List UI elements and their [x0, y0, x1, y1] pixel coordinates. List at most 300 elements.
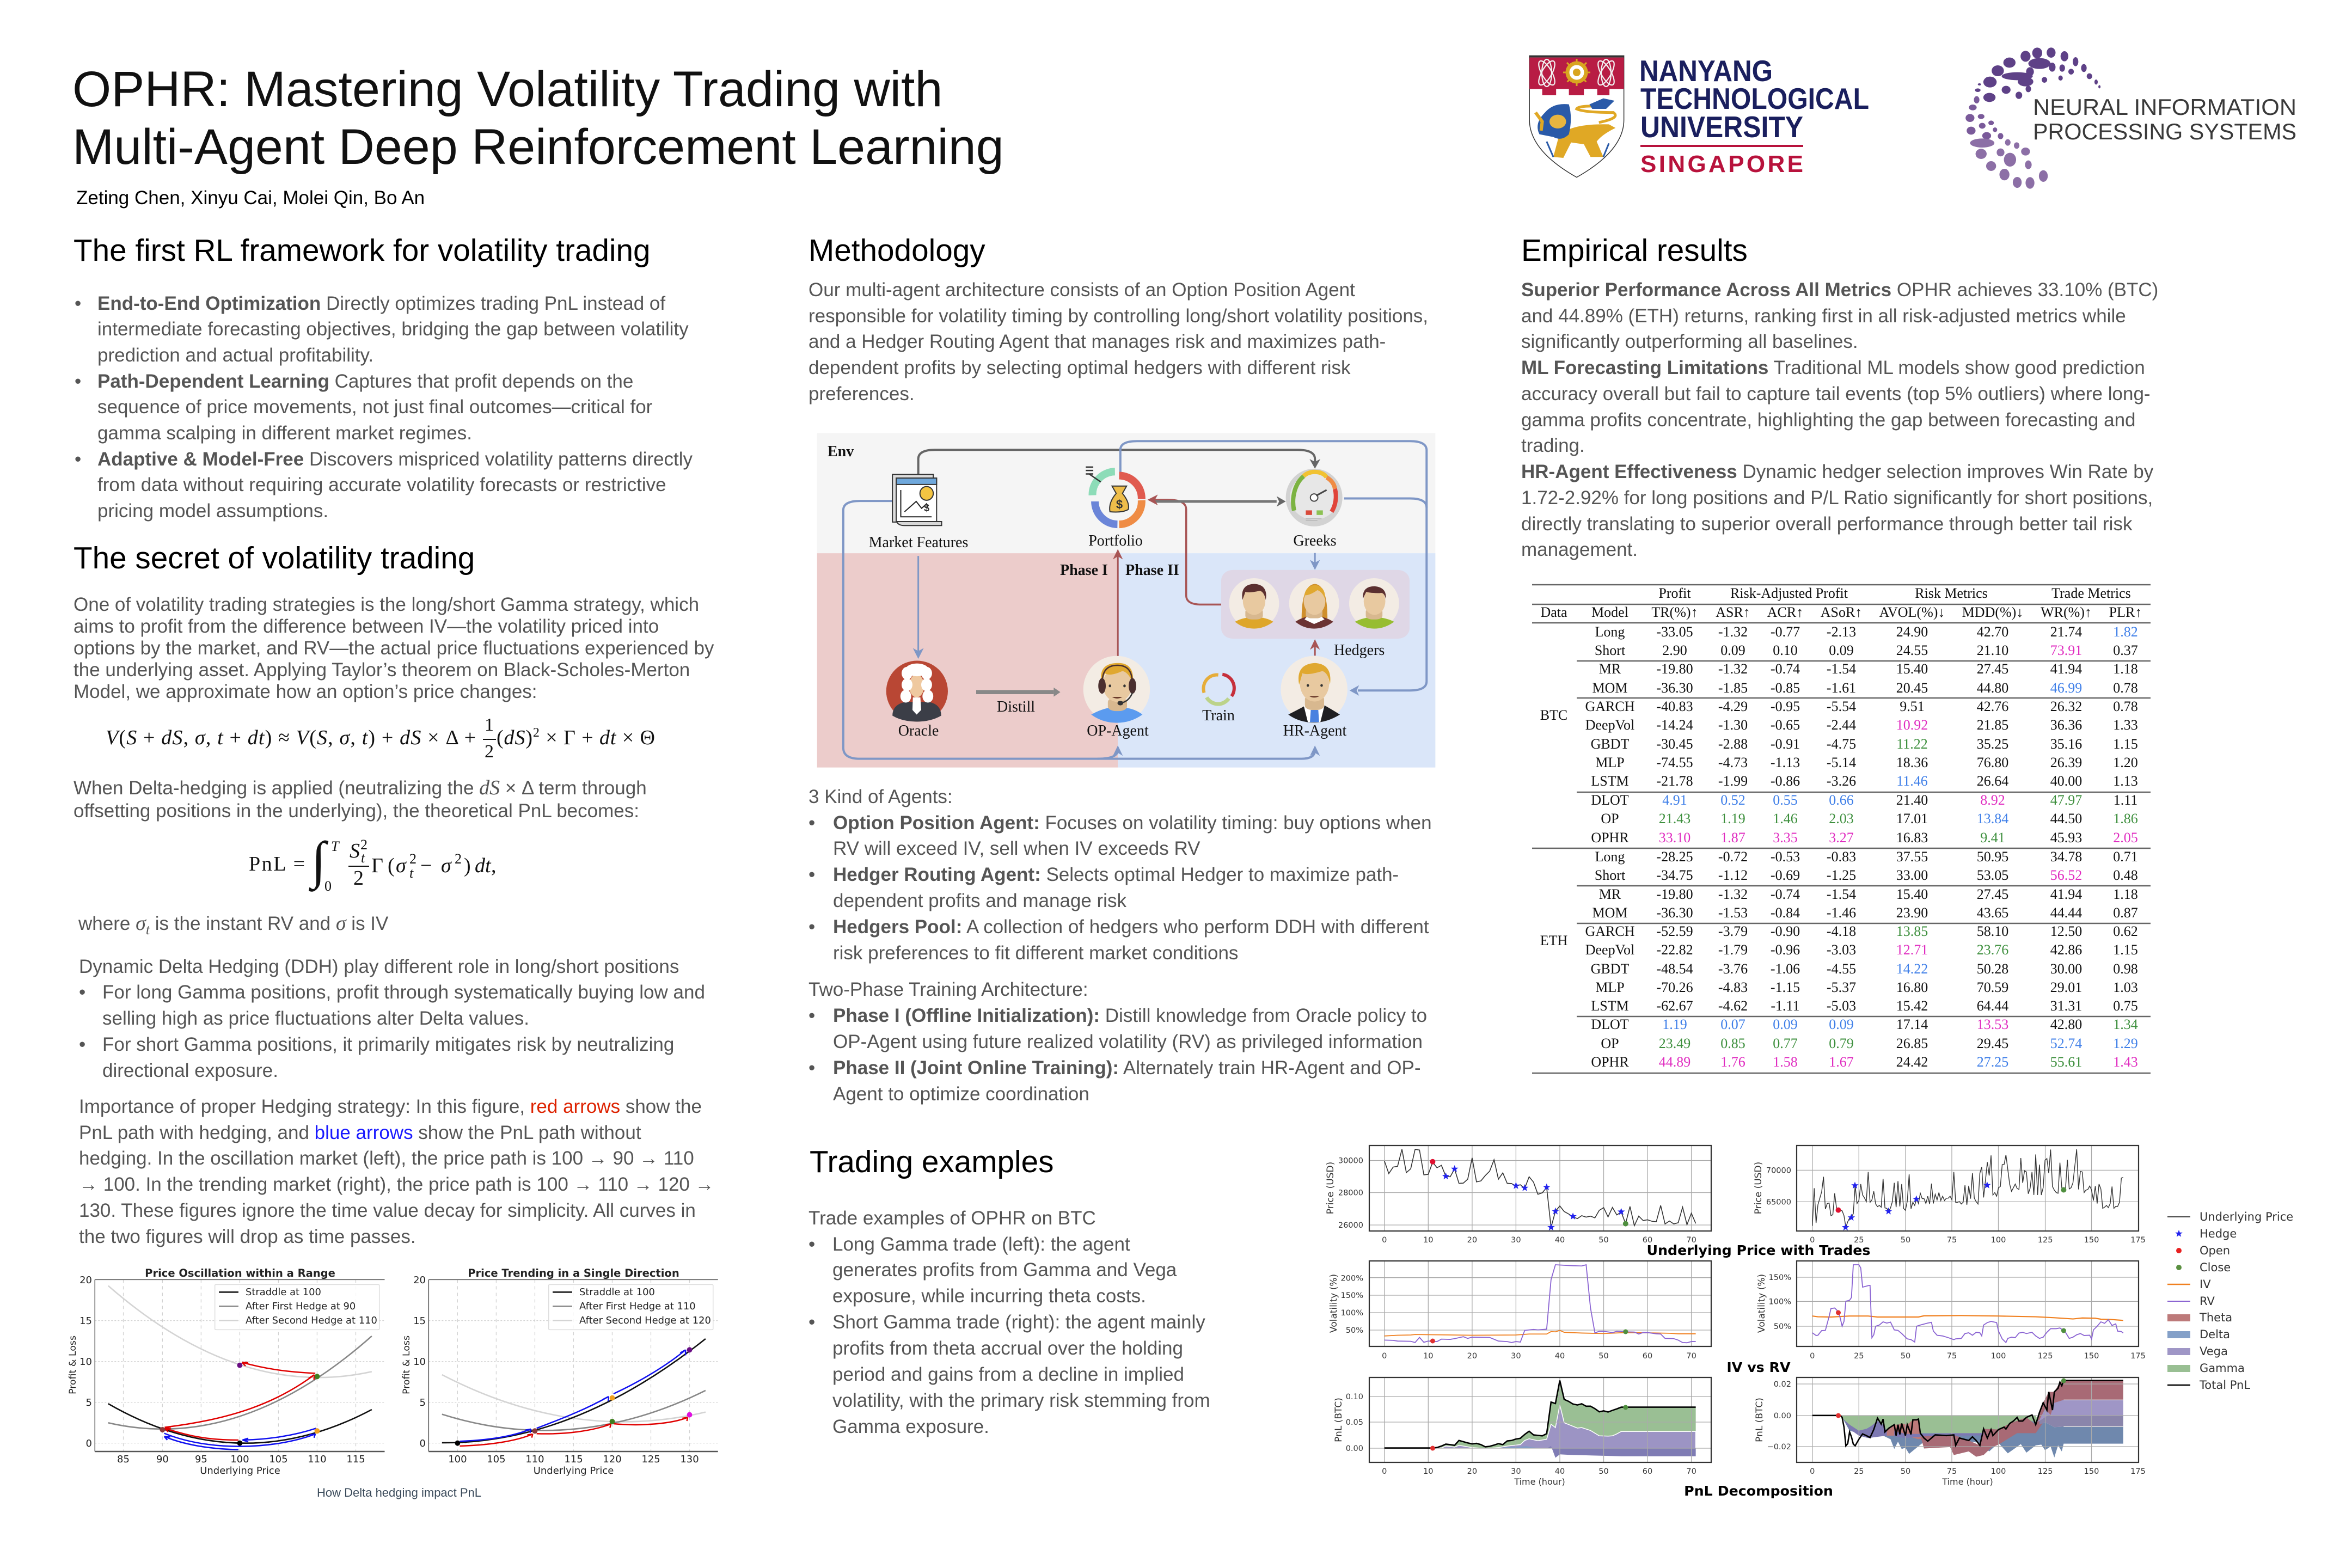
table: ETH rows: MOM [1592, 905, 1628, 921]
text block: importance of hedging: hedging. In the oscillation market (left), the price path is 100 → 90 → 110 [79, 1148, 694, 1169]
table: ETH rows: 0.48 [2113, 867, 2138, 883]
table: ETH rows: 58.10 [1977, 923, 2008, 939]
table: BTC rows: 26.64 [1977, 773, 2008, 789]
chart: short gamma IV vs RV: 100% [1769, 1297, 1791, 1306]
table header: Trade Metrics [2051, 585, 2131, 601]
chart: long gamma IV vs RV: 20 [1467, 1352, 1477, 1361]
text block: trade examples: generates profits from Gamma and Vega [832, 1259, 1177, 1281]
table: ETH rows [1540, 849, 2138, 1070]
table: BTC rows: 0.10 [1773, 642, 1798, 658]
table: BTC rows: -4.75 [1827, 736, 1856, 752]
table: ETH rows: -34.75 [1656, 867, 1693, 883]
table: ETH rows: 0.09 [1773, 1016, 1798, 1032]
table: BTC rows: 24.90 [1896, 624, 1928, 640]
chart: long gamma IV vs RV: 60 [1643, 1352, 1652, 1361]
table: BTC rows: -1.54 [1827, 661, 1856, 677]
equation: PnL integral: dt [475, 854, 492, 877]
table: BTC rows: -1.85 [1718, 680, 1748, 696]
text block: trade examples: • [808, 1312, 815, 1333]
chart: price trending in a single direction: After First Hedge at 110 [579, 1301, 696, 1312]
table: BTC rows: 0.55 [1773, 792, 1798, 808]
chart: price trending in a single direction: 100 [448, 1454, 467, 1465]
table: ETH rows: 27.45 [1977, 886, 2008, 902]
text block: trade examples: Short Gamma trade (right): the agent mainly [832, 1312, 1205, 1333]
table: ETH rows: -62.67 [1656, 998, 1693, 1014]
table: ETH rows: 24.42 [1896, 1054, 1928, 1070]
table: ETH rows: -1.15 [1771, 979, 1800, 995]
chart legend: Hedge [2200, 1227, 2237, 1240]
table: BTC rows: 15.40 [1896, 661, 1928, 677]
table: ETH rows: 42.80 [2050, 1016, 2082, 1032]
table: BTC rows [1540, 624, 2138, 846]
table: BTC rows: 2.03 [1829, 811, 1854, 826]
text block: empirical findings: directly translating to superior overall performance through better tail risk [1521, 513, 2133, 535]
table: BTC rows: 21.85 [1977, 717, 2008, 733]
chart: price trending in a single direction: 120 [603, 1454, 622, 1465]
chart: price trending in a single direction: 5 [420, 1397, 426, 1408]
table: BTC rows: -1.30 [1718, 717, 1748, 733]
text block: first RL framework bullets: End-to-End Optimization Directly optimizes trading PnL instead of [97, 293, 665, 314]
equation: Taylor expansion: × Γ + [540, 726, 599, 749]
chart: long gamma IV vs RV: 50 [1598, 1352, 1609, 1361]
table header: ASR↑ [1716, 604, 1750, 620]
text block: first RL framework bullets: intermediate forecasting objectives, bridging the gap between volatility [97, 318, 689, 340]
text block: empirical findings: significantly outperforming all baselines. [1521, 331, 1858, 352]
equation: PnL integral: − [420, 854, 432, 877]
table: BTC rows: 13.84 [1977, 811, 2008, 826]
chart: long gamma PnL decomposition: 50 [1598, 1467, 1609, 1476]
table: ETH rows: 16.80 [1896, 979, 1928, 995]
table: ETH rows: 56.52 [2050, 867, 2082, 883]
chart: short gamma IV vs RV: 175 [2130, 1352, 2146, 1361]
table: ETH rows: 70.59 [1977, 979, 2008, 995]
text block: trade examples: Trade examples of OPHR on BTC [808, 1208, 1096, 1229]
chart: short gamma price with trades: Price (USD) [1753, 1162, 1764, 1214]
chart: long gamma IV vs RV: 30 [1511, 1352, 1521, 1361]
text block: first RL framework bullets: gamma scalping in different market regimes. [97, 422, 472, 444]
table: ETH rows: 29.01 [2050, 979, 2082, 995]
chart: price oscillation within a range: After First Hedge at 90 [246, 1301, 356, 1312]
table: BTC rows: -3.26 [1827, 773, 1856, 789]
icons: three hedgers [1229, 578, 1399, 629]
table: ETH rows: 0.79 [1829, 1036, 1854, 1051]
chart: long gamma IV vs RV: 0 [1382, 1352, 1387, 1361]
title: Multi-Agent Deep Reinforcement Learning [72, 119, 1004, 175]
table: BTC rows: 1.13 [2113, 773, 2138, 789]
table: ETH rows: -4.62 [1718, 998, 1748, 1014]
chart: short gamma IV vs RV [1756, 1261, 2146, 1361]
chart: short gamma price with trades: 70000 [1766, 1166, 1791, 1175]
table: ETH rows: -1.06 [1771, 961, 1800, 977]
table: ETH rows: 14.22 [1896, 961, 1928, 977]
table: BTC rows: 44.80 [1977, 680, 2008, 696]
table: ETH rows: 0.75 [2113, 998, 2138, 1014]
table: ETH rows: -3.03 [1827, 942, 1856, 958]
chart: short gamma PnL decomposition: 175 [2130, 1467, 2146, 1476]
chart: short gamma PnL decomposition: 100 [1991, 1467, 2006, 1476]
chart: short gamma PnL decomposition: 0.00 [1774, 1412, 1791, 1420]
diagram: multi-agent architecture: Phase I [1060, 562, 1108, 579]
chart: short gamma IV vs RV: 100 [1991, 1352, 2006, 1361]
text block: empirical findings: management. [1521, 539, 1638, 560]
table: ETH rows: -5.03 [1827, 998, 1856, 1014]
chart: price trending in a single direction: Underlying Price [534, 1465, 614, 1477]
table header: Data [1540, 604, 1567, 620]
chart: long gamma PnL decomposition: 40 [1555, 1467, 1565, 1476]
table: ETH rows: -22.82 [1656, 942, 1693, 958]
text block: kinds of agents: • [808, 864, 815, 885]
text block: empirical findings: Superior Performance Across All Metrics OPHR achieves 33.10% (BTC) [1521, 279, 2158, 301]
table: BTC rows: 26.39 [2050, 755, 2082, 770]
table: BTC rows: -74.55 [1656, 755, 1693, 770]
chart: long gamma PnL decomposition: Time (hour) [1514, 1477, 1565, 1487]
text block: two-phase training: Two-Phase Training Architecture: [808, 979, 1088, 1000]
equation: Taylor expansion: 1 [485, 715, 494, 735]
chart: price oscillation within a range: 105 [269, 1454, 288, 1465]
table: ETH rows: -0.72 [1718, 849, 1748, 865]
table: BTC rows: 16.83 [1896, 830, 1928, 846]
table header: WR(%)↑ [2041, 604, 2092, 620]
text block: two-phase training: OP-Agent using future realized volatility (RV) as privileged information [833, 1031, 1423, 1052]
table: BTC rows: 18.36 [1896, 755, 1928, 770]
chart: long gamma PnL decomposition: 0.00 [1346, 1444, 1363, 1453]
chart: short gamma PnL decomposition: 50 [1901, 1467, 1910, 1476]
chart: price oscillation within a range: After Second Hedge at 110 [246, 1315, 377, 1326]
chart: price trending in a single direction: 115 [564, 1454, 583, 1465]
table: ETH rows: -1.11 [1771, 998, 1800, 1014]
chart legend: Close [2200, 1261, 2231, 1274]
equation: Taylor expansion: 2 [533, 726, 540, 740]
text block: first RL framework bullets: Adaptive & Model-Free Discovers mispriced volatility patterns directly [97, 449, 693, 470]
table: BTC rows: 1.46 [1773, 811, 1798, 826]
table: BTC rows: GARCH [1585, 699, 1635, 714]
chart: short gamma PnL decomposition: −0.02 [1767, 1443, 1791, 1451]
chart: short gamma IV vs RV: 0 [1810, 1352, 1815, 1361]
table: ETH rows: -70.26 [1656, 979, 1693, 995]
table: ETH rows: -1.25 [1827, 867, 1856, 883]
chart: short gamma IV vs RV: Volatility (%) [1756, 1274, 1767, 1333]
equation: PnL integral: ) [464, 854, 471, 877]
text block: kinds of agents: • [808, 916, 815, 938]
table: ETH rows: 53.05 [1977, 867, 2008, 883]
logo: Nanyang Technological University: TECHNOLOGICAL [1640, 82, 1869, 115]
chart legend: RV [2200, 1295, 2215, 1308]
chart: long gamma price with trades: 0 [1382, 1236, 1387, 1245]
chart: short gamma PnL decomposition: 0.02 [1774, 1380, 1791, 1389]
table: BTC rows: MOM [1592, 680, 1628, 696]
table: BTC rows: -40.83 [1656, 699, 1693, 714]
heading: first RL framework: The first RL framework for volatility trading [74, 234, 651, 268]
table: BTC rows: 33.10 [1659, 830, 1690, 846]
table: BTC rows: -4.29 [1718, 699, 1748, 714]
table: ETH rows: Long [1595, 849, 1625, 865]
table: BTC rows: -0.86 [1771, 773, 1800, 789]
table: BTC rows: -30.45 [1656, 736, 1693, 752]
chart: price oscillation within a range: 115 [346, 1454, 365, 1465]
caption: how delta hedging impacts PnL: How Delta hedging impact PnL [317, 1486, 481, 1499]
text block: kinds of agents: risk preferences to fit different market conditions [833, 942, 1238, 964]
chart: long gamma price with trades: 30000 [1338, 1156, 1363, 1165]
table: ETH rows: -0.84 [1771, 905, 1800, 921]
table: ETH rows: LSTM [1591, 998, 1629, 1014]
chart: price trending in a single direction: 105 [487, 1454, 506, 1465]
chart: short gamma PnL decomposition: 75 [1947, 1467, 1957, 1476]
table: BTC rows: -0.65 [1771, 717, 1800, 733]
table: BTC rows: 11.22 [1896, 736, 1928, 752]
table: BTC rows: GBDT [1591, 736, 1630, 752]
table: ETH rows: 1.29 [2113, 1036, 2138, 1051]
table: ETH rows: 30.00 [2050, 961, 2082, 977]
text block: kinds of agents: • [808, 812, 815, 834]
text block: empirical findings: trading. [1521, 435, 1585, 456]
text block: kinds of agents: Option Position Agent: Focuses on volatility timing: buy options when [833, 812, 1432, 834]
table: ETH rows: 1.18 [2113, 886, 2138, 902]
table: BTC rows: -4.73 [1718, 755, 1748, 770]
equation: PnL integral: S [350, 840, 360, 862]
logo: Neural Information Processing Systems: NEURAL INFORMATION [2033, 94, 2296, 120]
table: ETH rows: -5.37 [1827, 979, 1856, 995]
table header [1540, 585, 2142, 620]
chart legend: Underlying Price [2200, 1210, 2293, 1223]
table: ETH rows: 13.53 [1977, 1016, 2008, 1032]
text block: methodology intro [808, 279, 1428, 405]
table: ETH rows: 0.85 [1720, 1036, 1745, 1051]
table: ETH rows: 1.03 [2113, 979, 2138, 995]
table: BTC rows: -19.80 [1656, 661, 1693, 677]
table: BTC rows: 4.91 [1662, 792, 1687, 808]
text block: empirical findings: ML Forecasting Limitations Traditional ML models show good prediction [1521, 357, 2145, 378]
chart: price oscillation within a range: 90 [156, 1454, 169, 1465]
table: BTC rows: -1.99 [1718, 773, 1748, 789]
table: BTC rows: 1.86 [2113, 811, 2138, 826]
chart: long gamma PnL decomposition: 0 [1382, 1467, 1387, 1476]
table rules [1532, 585, 2151, 1073]
chart: long gamma PnL decomposition: 30 [1511, 1467, 1521, 1476]
chart: short gamma price with trades: 75 [1947, 1236, 1957, 1245]
text block: two-phase training: • [808, 1005, 815, 1026]
diagram: multi-agent architecture: Greeks [1293, 532, 1337, 549]
logo: Nanyang Technological University [1529, 54, 1869, 177]
chart: long gamma PnL decomposition: PnL (BTC) [1333, 1398, 1344, 1442]
table: ETH rows: -1.46 [1827, 905, 1856, 921]
chart: price oscillation within a range: 5 [86, 1397, 92, 1408]
table: BTC rows: -0.77 [1771, 624, 1800, 640]
table: ETH rows: Short [1595, 867, 1626, 883]
table: ETH rows: 33.00 [1896, 867, 1928, 883]
chart: long gamma price with trades: 70 [1686, 1236, 1696, 1245]
chart: long gamma IV vs RV: 10 [1423, 1352, 1434, 1361]
table: ETH rows: -1.79 [1718, 942, 1748, 958]
text block: dynamic delta hedging: For short Gamma positions, it primarily mitigates risk by neutralizing [102, 1034, 674, 1055]
text block: dynamic delta hedging: directional exposure. [102, 1060, 278, 1081]
chart: short gamma price with trades: 25 [1854, 1236, 1864, 1245]
table header: MDD(%)↓ [1962, 604, 2023, 620]
table: BTC rows: 35.16 [2050, 736, 2082, 752]
chart: price oscillation within a range: 100 [230, 1454, 249, 1465]
table: ETH rows: OPHR [1591, 1054, 1629, 1070]
equation: Taylor expansion: 2 [485, 742, 494, 762]
table: BTC rows: 42.70 [1977, 624, 2008, 640]
table: BTC rows: 21.74 [2050, 624, 2082, 640]
table: ETH rows: 52.74 [2050, 1036, 2082, 1051]
chart: long gamma IV vs RV: 200% [1341, 1275, 1363, 1283]
table: ETH rows: OP [1601, 1036, 1619, 1051]
chart: short gamma IV vs RV: 150 [2084, 1352, 2099, 1361]
text block: long/short gamma strategy: the underlying asset. Applying Taylor’s theorem on Black-Scholes-Merton [74, 659, 690, 681]
table: ETH rows: 15.42 [1896, 998, 1928, 1014]
text block: empirical findings [1521, 279, 2158, 560]
table: BTC rows: 21.43 [1659, 811, 1690, 826]
table: BTC rows: 2.05 [2113, 830, 2138, 846]
text block: two-phase training: Phase II (Joint Online Training): Alternately train HR-Agent and OP- [833, 1057, 1421, 1079]
chart title: IV vs RV: IV vs RV [1726, 1359, 1791, 1375]
table: BTC rows: 27.45 [1977, 661, 2008, 677]
arrows: flows between components [843, 441, 1426, 759]
table: BTC rows: 73.91 [2050, 642, 2082, 658]
table: ETH rows: 0.87 [2113, 905, 2138, 921]
table: ETH rows: 55.61 [2050, 1054, 2082, 1070]
table: ETH rows: 50.95 [1977, 849, 2008, 865]
text block: dynamic delta hedging: Dynamic Delta Hedging (DDH) play different role in long/short positions [79, 956, 679, 977]
table: BTC rows: 0.09 [1829, 642, 1854, 658]
table: ETH rows: DLOT [1591, 1016, 1629, 1032]
table: BTC rows: 9.51 [1900, 699, 1925, 714]
chart: price oscillation within a range: 10 [79, 1356, 92, 1368]
chart: short gamma price with trades [1753, 1146, 2146, 1245]
chart: long gamma PnL decomposition: 10 [1423, 1467, 1434, 1476]
table: BTC rows: 1.15 [2113, 736, 2138, 752]
table: BTC rows: -5.54 [1827, 699, 1856, 714]
chart: short gamma PnL decomposition: Time (hour) [1941, 1477, 1993, 1487]
table: BTC rows: 0.52 [1720, 792, 1745, 808]
table: ETH rows: 0.09 [1829, 1016, 1854, 1032]
chart: short gamma price with trades: 175 [2130, 1236, 2146, 1245]
title [72, 62, 1004, 175]
table: ETH rows: 1.58 [1773, 1054, 1798, 1070]
table: BTC rows: MR [1599, 661, 1621, 677]
table header: ACR↑ [1767, 604, 1803, 620]
chart: long gamma price with trades: 40 [1555, 1236, 1565, 1245]
equation: PnL integral: σ [396, 854, 407, 877]
chart legend: Open [2200, 1244, 2230, 1257]
text block: long/short gamma strategy: options by the market, and RV—the actual price fluctuations experienced by [74, 638, 714, 659]
text block: delta hedging: offsetting positions in the underlying), the theoretical PnL becomes: [74, 800, 639, 822]
table: BTC rows: BTC [1540, 707, 1567, 723]
diagram: multi-agent architecture: Train [1202, 707, 1235, 724]
table: ETH rows: -0.74 [1771, 886, 1800, 902]
chart: long gamma price with trades: 28000 [1338, 1189, 1363, 1198]
chart: short gamma IV vs RV: 75 [1947, 1352, 1957, 1361]
chart: price trending in a single direction: After Second Hedge at 120 [579, 1315, 711, 1326]
text block: trade examples: profits from theta accrual over the holding [832, 1338, 1183, 1359]
table: ETH rows: MLP [1595, 979, 1625, 995]
table: ETH rows: 42.86 [2050, 942, 2082, 958]
text: sigma definition: where σ [78, 912, 146, 935]
diagram: multi-agent architecture: OP-Agent [1087, 722, 1149, 739]
chart: price trending in a single direction: Price Trending in a Single Direction [468, 1267, 679, 1279]
chart: price oscillation within a range [68, 1267, 385, 1477]
table: BTC rows: 47.97 [2050, 792, 2082, 808]
table: BTC rows: 3.35 [1773, 830, 1798, 846]
chart: long gamma price with trades: 20 [1467, 1236, 1477, 1245]
hedgers pool box [1221, 570, 1410, 639]
logo: Nanyang Technological University: SINGAPORE [1640, 151, 1803, 177]
text block: two-phase training: • [808, 1057, 815, 1079]
table: BTC rows: -33.05 [1656, 624, 1693, 640]
text block: first RL framework bullets: from data without requiring accurate volatility forecasts or restrictive [97, 474, 666, 495]
text block: methodology intro: Our multi-agent architecture consists of an Option Position Agent [808, 279, 1355, 301]
table: BTC rows: MLP [1595, 755, 1625, 770]
table: BTC rows: Long [1595, 624, 1625, 640]
table: ETH rows: -3.79 [1718, 923, 1748, 939]
chart: price oscillation within a range: Underlying Price [200, 1465, 280, 1477]
diagram: multi-agent architecture: Portfolio [1088, 532, 1143, 549]
table: BTC rows: 44.50 [2050, 811, 2082, 826]
text block: empirical findings: 1.72-2.92% for long positions and P/L Ratio significantly for short positions, [1521, 487, 2153, 509]
diagram: multi-agent architecture: HR-Agent [1283, 722, 1347, 739]
chart: price oscillation within a range: 15 [79, 1315, 92, 1327]
table: BTC rows: 0.09 [1720, 642, 1745, 658]
text block: first RL framework bullets: • [75, 371, 81, 392]
chart legend: Total PnL [2199, 1379, 2250, 1392]
table: ETH rows: 23.90 [1896, 905, 1928, 921]
chart: short gamma IV vs RV: 50% [1774, 1322, 1791, 1331]
text block: empirical findings: accuracy overall but fail to capture tail events (top 5% outliers) where long- [1521, 383, 2151, 405]
equation: Taylor expansion: (dS) [497, 726, 532, 749]
chart: short gamma IV vs RV: 125 [2038, 1352, 2053, 1361]
table: BTC rows: 21.10 [1977, 642, 2008, 658]
equation: PnL integral: , [491, 854, 497, 877]
text block: dynamic delta hedging: selling high as price fluctuations alter Delta values. [102, 1008, 529, 1029]
chart legend: Delta [2200, 1328, 2230, 1341]
chart: price oscillation within a range: 20 [79, 1275, 92, 1286]
table: ETH rows: -1.53 [1718, 905, 1748, 921]
table: ETH rows: -4.18 [1827, 923, 1856, 939]
table header: Risk-Adjusted Profit [1730, 585, 1848, 601]
chart: price oscillation within a range: 0 [86, 1438, 92, 1449]
table: ETH rows: 0.07 [1720, 1016, 1745, 1032]
table: ETH rows: 15.40 [1896, 886, 1928, 902]
chart: long gamma price with trades: 60 [1643, 1236, 1652, 1245]
table: ETH rows: 34.78 [2050, 849, 2082, 865]
chart: short gamma PnL decomposition: 125 [2038, 1467, 2053, 1476]
chart: long gamma price with trades: 50 [1598, 1236, 1609, 1245]
table: ETH rows: DeepVol [1585, 942, 1634, 958]
table: ETH rows: 64.44 [1977, 998, 2008, 1014]
diagram: multi-agent architecture: Phase II [1125, 562, 1179, 579]
chart: long gamma price with trades [1325, 1146, 1711, 1245]
table: BTC rows: -1.32 [1718, 661, 1748, 677]
table: BTC rows: DLOT [1591, 792, 1629, 808]
table: ETH rows: -28.25 [1656, 849, 1693, 865]
logo: Nanyang Technological University: NANYANG [1639, 54, 1773, 88]
table: ETH rows: 12.50 [2050, 923, 2082, 939]
table: BTC rows: 35.25 [1977, 736, 2008, 752]
table: ETH rows: 44.89 [1659, 1054, 1690, 1070]
text block: empirical findings: HR-Agent Effectiveness Dynamic hedger selection improves Win Rate by [1521, 461, 2154, 482]
diagram: multi-agent architecture: Hedgers [1334, 642, 1385, 659]
text block: empirical findings: and 44.89% (ETH) returns, ranking first in all risk-adjusted metrics while [1521, 305, 2126, 327]
chart: price oscillation within a range: 110 [308, 1454, 327, 1465]
chart: price trending in a single direction: 110 [525, 1454, 544, 1465]
table: ETH rows: 17.14 [1896, 1016, 1928, 1032]
table: ETH rows: 0.62 [2113, 923, 2138, 939]
table: BTC rows: LSTM [1591, 773, 1629, 789]
table: ETH rows: 1.67 [1829, 1054, 1854, 1070]
diagram: multi-agent architecture: $ [924, 503, 929, 513]
table: ETH rows: 12.71 [1896, 942, 1928, 958]
chart title: underlying price with trades: Underlying Price with Trades [1646, 1242, 1871, 1258]
